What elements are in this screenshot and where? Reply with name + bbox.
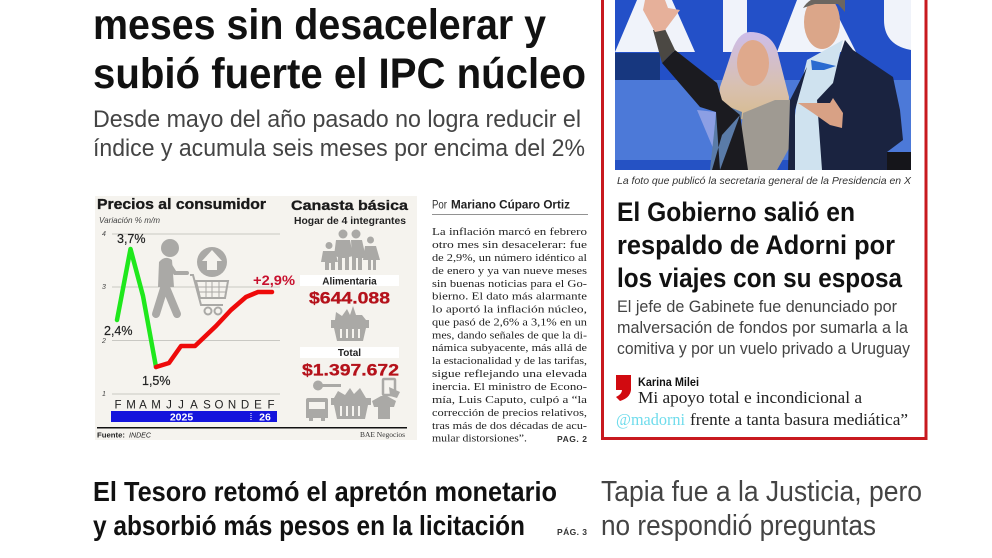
article text: námica subyacente, más allá de	[432, 342, 587, 354]
label: total: Total	[338, 348, 361, 359]
line chart: 4	[102, 231, 106, 238]
heading: precios al consumidor: Precios al consumidor	[97, 197, 266, 213]
side subheading: malversación de fondos por sumarla a la	[617, 319, 909, 337]
page reference: PAG. 2	[557, 434, 587, 444]
month axis: M	[126, 400, 136, 412]
quote text: Mi apoyo total e incondicional a	[638, 388, 862, 407]
icons: expenses	[306, 379, 400, 421]
article text: sigue reflejando una elevada	[432, 368, 587, 380]
line chart: 1	[102, 391, 106, 398]
label: total	[300, 347, 399, 359]
photo caption: La foto que publicó la secretaria general de la Presidencia en X	[617, 175, 912, 187]
woman	[643, 0, 792, 170]
article text: mes, dando señales de que la di-	[432, 330, 587, 342]
byline: Mariano Cúparo Ortiz	[451, 200, 570, 212]
main headline: meses sin desacelerar y	[93, 1, 546, 49]
year bar	[111, 411, 277, 424]
icon: family	[321, 230, 380, 270]
icon: shopper with cart	[156, 239, 228, 314]
month axis: J	[166, 400, 172, 412]
article text: sin buenas noticias para el Go-	[432, 278, 587, 290]
source rule	[97, 427, 407, 428]
month axis: N	[228, 400, 236, 412]
article text: otro mes sin desacelerar: fue	[432, 239, 587, 251]
month axis: M	[151, 400, 161, 412]
article text: inercia. El ministro de Econo-	[432, 381, 587, 393]
photo	[615, 0, 911, 170]
article text: la estacionalidad y de las tarifas,	[432, 355, 587, 367]
subheading: índice y acumula seis meses por encima del 2%	[93, 135, 585, 162]
quote text: @madorni	[616, 410, 685, 429]
man	[788, 0, 911, 170]
label: +2,9%: +2,9%	[253, 273, 295, 288]
bottom left headline: y absorbió más pesos en la licitación	[93, 510, 525, 541]
side subheading	[617, 298, 911, 358]
line chart: 2	[101, 338, 106, 345]
data labels: 2,4%	[104, 324, 132, 338]
line chart: 3	[102, 284, 106, 291]
article text: de enero y ya van nueve meses	[432, 265, 587, 277]
side subheading: comitiva y por un vuelo privado a Uruguay	[617, 340, 911, 358]
byline	[432, 200, 588, 215]
side headline: respaldo de Adorni por	[617, 230, 895, 260]
article text: mía, Luis Caputo, culpó a “la	[432, 394, 587, 406]
bottom left headline: El Tesoro retomó el apretón monetario	[93, 476, 557, 507]
quote author: Karina Milei	[638, 377, 699, 389]
icon: food basket	[331, 306, 369, 341]
month axis: J	[178, 400, 184, 412]
article text: que pasó de 2,6% a 3,1% en un	[432, 316, 588, 328]
year bar: 2025	[170, 412, 193, 424]
chart subtitle: Variación % m/m	[99, 216, 160, 225]
data labels: 3,7%	[117, 232, 146, 246]
month axis: A	[190, 400, 198, 412]
month axis	[114, 400, 275, 412]
data labels: 1,5%	[142, 374, 170, 388]
article text: tras más de dos décadas de acu-	[432, 420, 587, 432]
green line	[117, 249, 156, 367]
source: INDEC	[129, 430, 152, 440]
side headline	[617, 197, 903, 293]
year bar: 26	[259, 412, 271, 424]
value: alimentaria: $644.088	[309, 288, 390, 308]
line chart	[97, 197, 408, 440]
stage letters	[615, 0, 911, 52]
source: Fuente:	[97, 430, 125, 440]
value: total: $1.397.672	[302, 360, 399, 380]
subtitle: hogar: Hogar de 4 integrantes	[294, 216, 406, 227]
month axis: A	[139, 400, 147, 412]
month axis: O	[215, 400, 224, 412]
side headline: los viajes con su esposa	[617, 263, 903, 293]
bottom right headline	[601, 476, 922, 542]
subheading	[93, 106, 585, 162]
month axis: F	[114, 400, 122, 412]
byline: Por	[432, 200, 447, 212]
panel: red frame	[602, 0, 926, 438]
icon: red quote mark	[616, 375, 631, 401]
data labels	[104, 232, 170, 388]
month axis: E	[254, 400, 262, 412]
page reference: PÁG. 3	[557, 527, 587, 537]
article text: mular distorsiones”.	[432, 432, 527, 444]
quote text: frente a tanta basura mediática”	[690, 410, 908, 429]
side subheading: El jefe de Gabinete fue denunciado por	[617, 298, 897, 316]
article text: La inflación marcó en febrero	[432, 226, 588, 238]
subheading: Desde mayo del año pasado no logra reducir el	[93, 106, 581, 133]
label: alimentaria: Alimentaria	[322, 276, 377, 288]
heading: canasta básica: Canasta básica	[291, 197, 408, 213]
month axis: S	[203, 400, 211, 412]
main headline	[93, 1, 586, 98]
bottom right headline: no respondió preguntas	[601, 510, 876, 542]
article text: lo aportó la inflación núcleo,	[432, 304, 587, 316]
article text: de 2,9%, un número idéntico al	[432, 252, 587, 264]
month axis: F	[267, 400, 275, 412]
main headline: subió fuerte el IPC núcleo	[93, 50, 586, 98]
bottom right headline: Tapia fue a la Justicia, pero	[601, 476, 922, 508]
label: alimentaria	[300, 275, 399, 288]
article text	[432, 226, 588, 444]
quote text	[616, 388, 908, 429]
red line	[156, 292, 272, 367]
month axis: D	[241, 400, 249, 412]
article text: bierno. El dato más alarmante	[432, 290, 587, 302]
article text: corrección de precios relativos,	[432, 407, 587, 419]
side headline: El Gobierno salió en	[617, 197, 855, 227]
source	[97, 430, 152, 440]
bottom left headline	[93, 476, 557, 541]
credit: BAE Negocios	[360, 430, 405, 439]
